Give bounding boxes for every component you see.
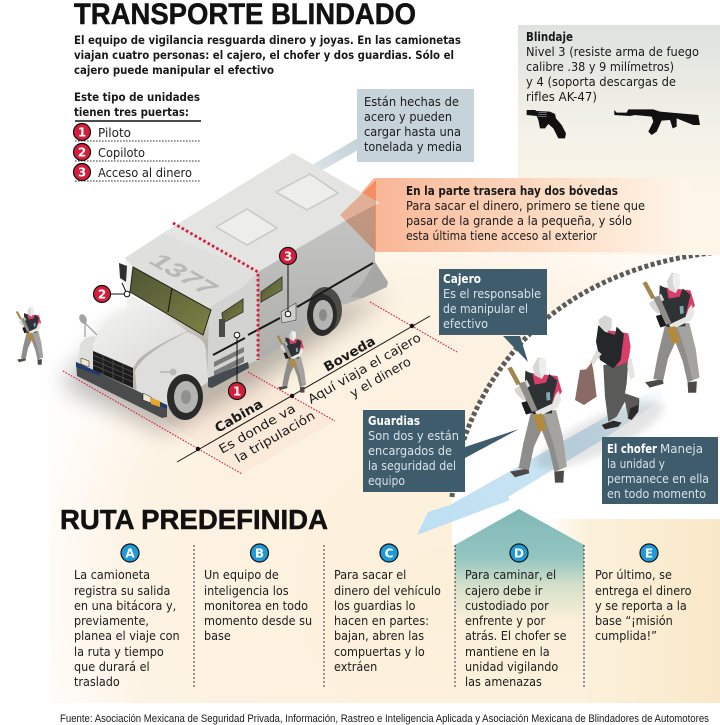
callout: cajero <box>439 269 547 362</box>
intro text <box>74 33 461 77</box>
white route area behind the figures <box>452 252 720 545</box>
step B: B <box>255 546 264 560</box>
step C: dinero del vehículo <box>334 583 441 598</box>
step B: momento desde su <box>204 613 312 628</box>
panel: blindaje: Blindaje <box>526 30 573 44</box>
step A: A <box>125 546 135 560</box>
step D <box>465 544 567 689</box>
callout: steel capacity: cargar hasta una <box>364 125 461 139</box>
left front mirror <box>78 313 97 337</box>
vault banner text: esta última tiene acceso al exterior <box>406 229 597 243</box>
panel: doors list: 1 <box>78 126 86 140</box>
panel: doors list: Acceso al dinero <box>98 165 192 180</box>
callout: cajero: efectivo <box>443 317 488 331</box>
callout: steel capacity: acero y pueden <box>364 110 452 124</box>
step E <box>595 544 691 643</box>
step A: traslado <box>74 674 120 689</box>
label: boveda: Aquí viaja el cajero <box>305 330 423 407</box>
step D: atrás. El chofer se <box>465 628 567 643</box>
marker 3: 3 <box>284 250 292 264</box>
step A: en una bitácora y, <box>74 598 176 613</box>
arrow: route direction <box>417 388 680 535</box>
figure: front guard <box>507 357 567 483</box>
step E: Por último, se <box>595 567 672 582</box>
dashed route arc <box>452 252 720 497</box>
step C: Para sacar el <box>334 567 406 582</box>
lower side vents <box>214 347 244 377</box>
vault banner text: pasar de la grande a la pequeña, y sólo <box>406 214 632 228</box>
marker 3 <box>280 248 296 317</box>
headlights <box>81 358 160 407</box>
step E: E <box>645 546 653 560</box>
bumper <box>76 362 167 418</box>
step B: monitorea en todo <box>204 598 308 613</box>
roof hatch front <box>216 209 277 245</box>
callout: steel capacity <box>300 89 474 176</box>
step E: entrega el dinero <box>595 583 691 598</box>
step A: planea el viaje con <box>74 628 180 643</box>
truck cab roof <box>125 233 258 309</box>
step B: Un equipo de <box>204 567 279 582</box>
step D: mantiene en la <box>465 644 550 659</box>
step D: Para caminar, el <box>465 567 556 582</box>
panel: doors list: Este tipo de unidades <box>74 90 200 104</box>
step A: la ruta y tiempo <box>74 644 164 659</box>
step D: unidad vigilando <box>465 659 558 674</box>
step E: y se reporta a la <box>595 598 687 613</box>
figure: guard by the truck <box>277 331 306 393</box>
wheel arch rear <box>308 287 342 333</box>
thick red dotted division lines <box>173 223 258 360</box>
truck cab side <box>207 272 258 382</box>
marker 1: 1 <box>233 384 241 398</box>
step A: que durará el <box>74 659 150 674</box>
figure shadow <box>529 389 671 481</box>
callout: steel capacity: tonelada y media <box>364 140 462 154</box>
step C: bajan, abren las <box>334 628 424 643</box>
windshield <box>130 267 211 335</box>
icon: revolver <box>527 110 566 138</box>
step D: enfrente y por <box>465 613 545 628</box>
label: boveda: Boveda <box>322 334 378 375</box>
steps <box>208 362 249 388</box>
callout: cajero: de manipular el <box>443 302 528 316</box>
step A: registra su salida <box>74 583 170 598</box>
intro text: El equipo de vigilancia resguarda dinero y joyas. En las camionetas <box>74 33 461 47</box>
marker 2 <box>94 283 130 302</box>
panel: blindaje <box>518 25 720 255</box>
panel: doors list: Copiloto <box>98 145 145 160</box>
label: cabina <box>212 397 317 466</box>
callout: guardias: encargados de <box>368 444 452 458</box>
step C: extráen <box>334 659 377 674</box>
figure: far-left guard <box>16 307 43 365</box>
callout: cajero: Es el responsable <box>443 287 541 301</box>
step D: D <box>514 546 524 560</box>
windshield pillar <box>168 288 172 312</box>
step A <box>74 544 180 689</box>
callout: guardias: Guardias <box>368 414 420 428</box>
panel: doors list: 3 <box>78 166 86 180</box>
banner tint over the truck rear <box>340 180 376 252</box>
vault banner text <box>406 184 645 243</box>
panel: doors list: Piloto <box>98 125 131 140</box>
step A: previamente, <box>74 613 149 628</box>
rear wheel <box>307 294 337 336</box>
hood <box>93 306 187 368</box>
front wheel <box>167 374 203 420</box>
label: cabina: la tripulación <box>232 408 317 466</box>
background wash <box>50 200 720 703</box>
callout: guardias: la seguridad del <box>368 459 456 473</box>
right fender <box>135 332 208 406</box>
step D: las amenazas <box>465 674 542 689</box>
fine red dotted floor lines <box>63 302 457 474</box>
callout: el chofer: Maneja <box>660 442 703 456</box>
label: boveda: y el dinero <box>347 354 413 401</box>
step D: custodiado por <box>465 598 549 613</box>
truck bumper rear <box>350 262 388 298</box>
step B <box>204 544 312 643</box>
panel: blindaje: Nivel 3 (resiste arma de fuego <box>526 45 699 59</box>
step A: La camioneta <box>74 567 150 582</box>
panel: blindaje: rifles AK-47) <box>526 90 597 104</box>
callout: guardias <box>363 410 519 492</box>
side mirror <box>219 319 225 337</box>
panel: right-hand cream band <box>548 519 720 703</box>
label: cabina: Cabina <box>212 397 266 436</box>
step C: los guardias lo <box>334 598 416 613</box>
roof hatch rear <box>276 174 338 210</box>
panel: blindaje: calibre .38 y 9 milímetros) <box>526 60 674 74</box>
panel: vault banner <box>340 178 690 252</box>
measure line <box>177 316 430 462</box>
heading: ruta predefinida: RUTA PREDEFINIDA <box>60 504 328 535</box>
step C: C <box>385 546 394 560</box>
step C: compuertas y lo <box>334 644 425 659</box>
door window <box>222 299 243 323</box>
truck vault side <box>258 205 375 360</box>
grille <box>93 351 133 388</box>
side stripe <box>213 263 373 355</box>
marker 2: 2 <box>98 288 106 302</box>
left fender <box>78 336 95 372</box>
callout: steel capacity: Están hechas de <box>364 95 459 109</box>
step B: base <box>204 628 231 643</box>
panel: house highlight for step D <box>455 509 584 703</box>
step C: hacen en partes: <box>334 613 429 628</box>
cab front wall <box>125 258 150 310</box>
vault window <box>261 277 282 302</box>
column dividers <box>194 545 584 687</box>
callout: el chofer: la unidad y <box>607 457 665 471</box>
roof number: 1377 <box>142 250 225 299</box>
intro text: cajero puede manipular el efectivo <box>74 63 274 77</box>
callout: el chofer: en todo momento <box>607 487 706 501</box>
right fender mirror <box>160 371 170 373</box>
callout: guardias: equipo <box>368 474 405 488</box>
callout: cajero: Cajero <box>443 272 481 286</box>
figure: rear guard <box>642 272 699 393</box>
floor zones under the truck <box>60 295 390 474</box>
armored truck <box>76 153 388 420</box>
truck roof <box>163 153 380 272</box>
vault banner text: Para sacar el dinero, primero se tiene que <box>406 199 645 213</box>
step C <box>334 544 441 674</box>
cab mirror <box>119 263 127 282</box>
panel: blindaje: y 4 (soporta descargas de <box>526 75 676 89</box>
callout: el chofer: El chofer <box>607 442 657 456</box>
callout: el chofer <box>602 437 718 504</box>
panel: doors list: 2 <box>78 146 86 160</box>
money hatch <box>281 303 296 323</box>
step D: cajero debe ir <box>465 583 542 598</box>
step E: cumplida!” <box>595 628 657 643</box>
step E: base “¡misión <box>595 613 673 628</box>
panel: doors list <box>74 90 201 181</box>
figure: cashier with bag <box>575 315 639 429</box>
intro text: viajan cuatro personas: el cajero, el chofer y dos guardias. Sólo el <box>74 48 454 62</box>
marker 1 <box>228 332 246 400</box>
panel: doors list: tienen tres puertas: <box>74 105 189 119</box>
vault banner text: En la parte trasera hay dos bóvedas <box>406 184 618 198</box>
callout: guardias: Son dos y están <box>368 429 459 443</box>
label: cabina: Es donde va <box>216 401 298 457</box>
step B: inteligencia los <box>204 583 289 598</box>
icon: AK-47 rifle <box>614 109 700 135</box>
callout: el chofer: permanece en ella <box>607 472 709 486</box>
